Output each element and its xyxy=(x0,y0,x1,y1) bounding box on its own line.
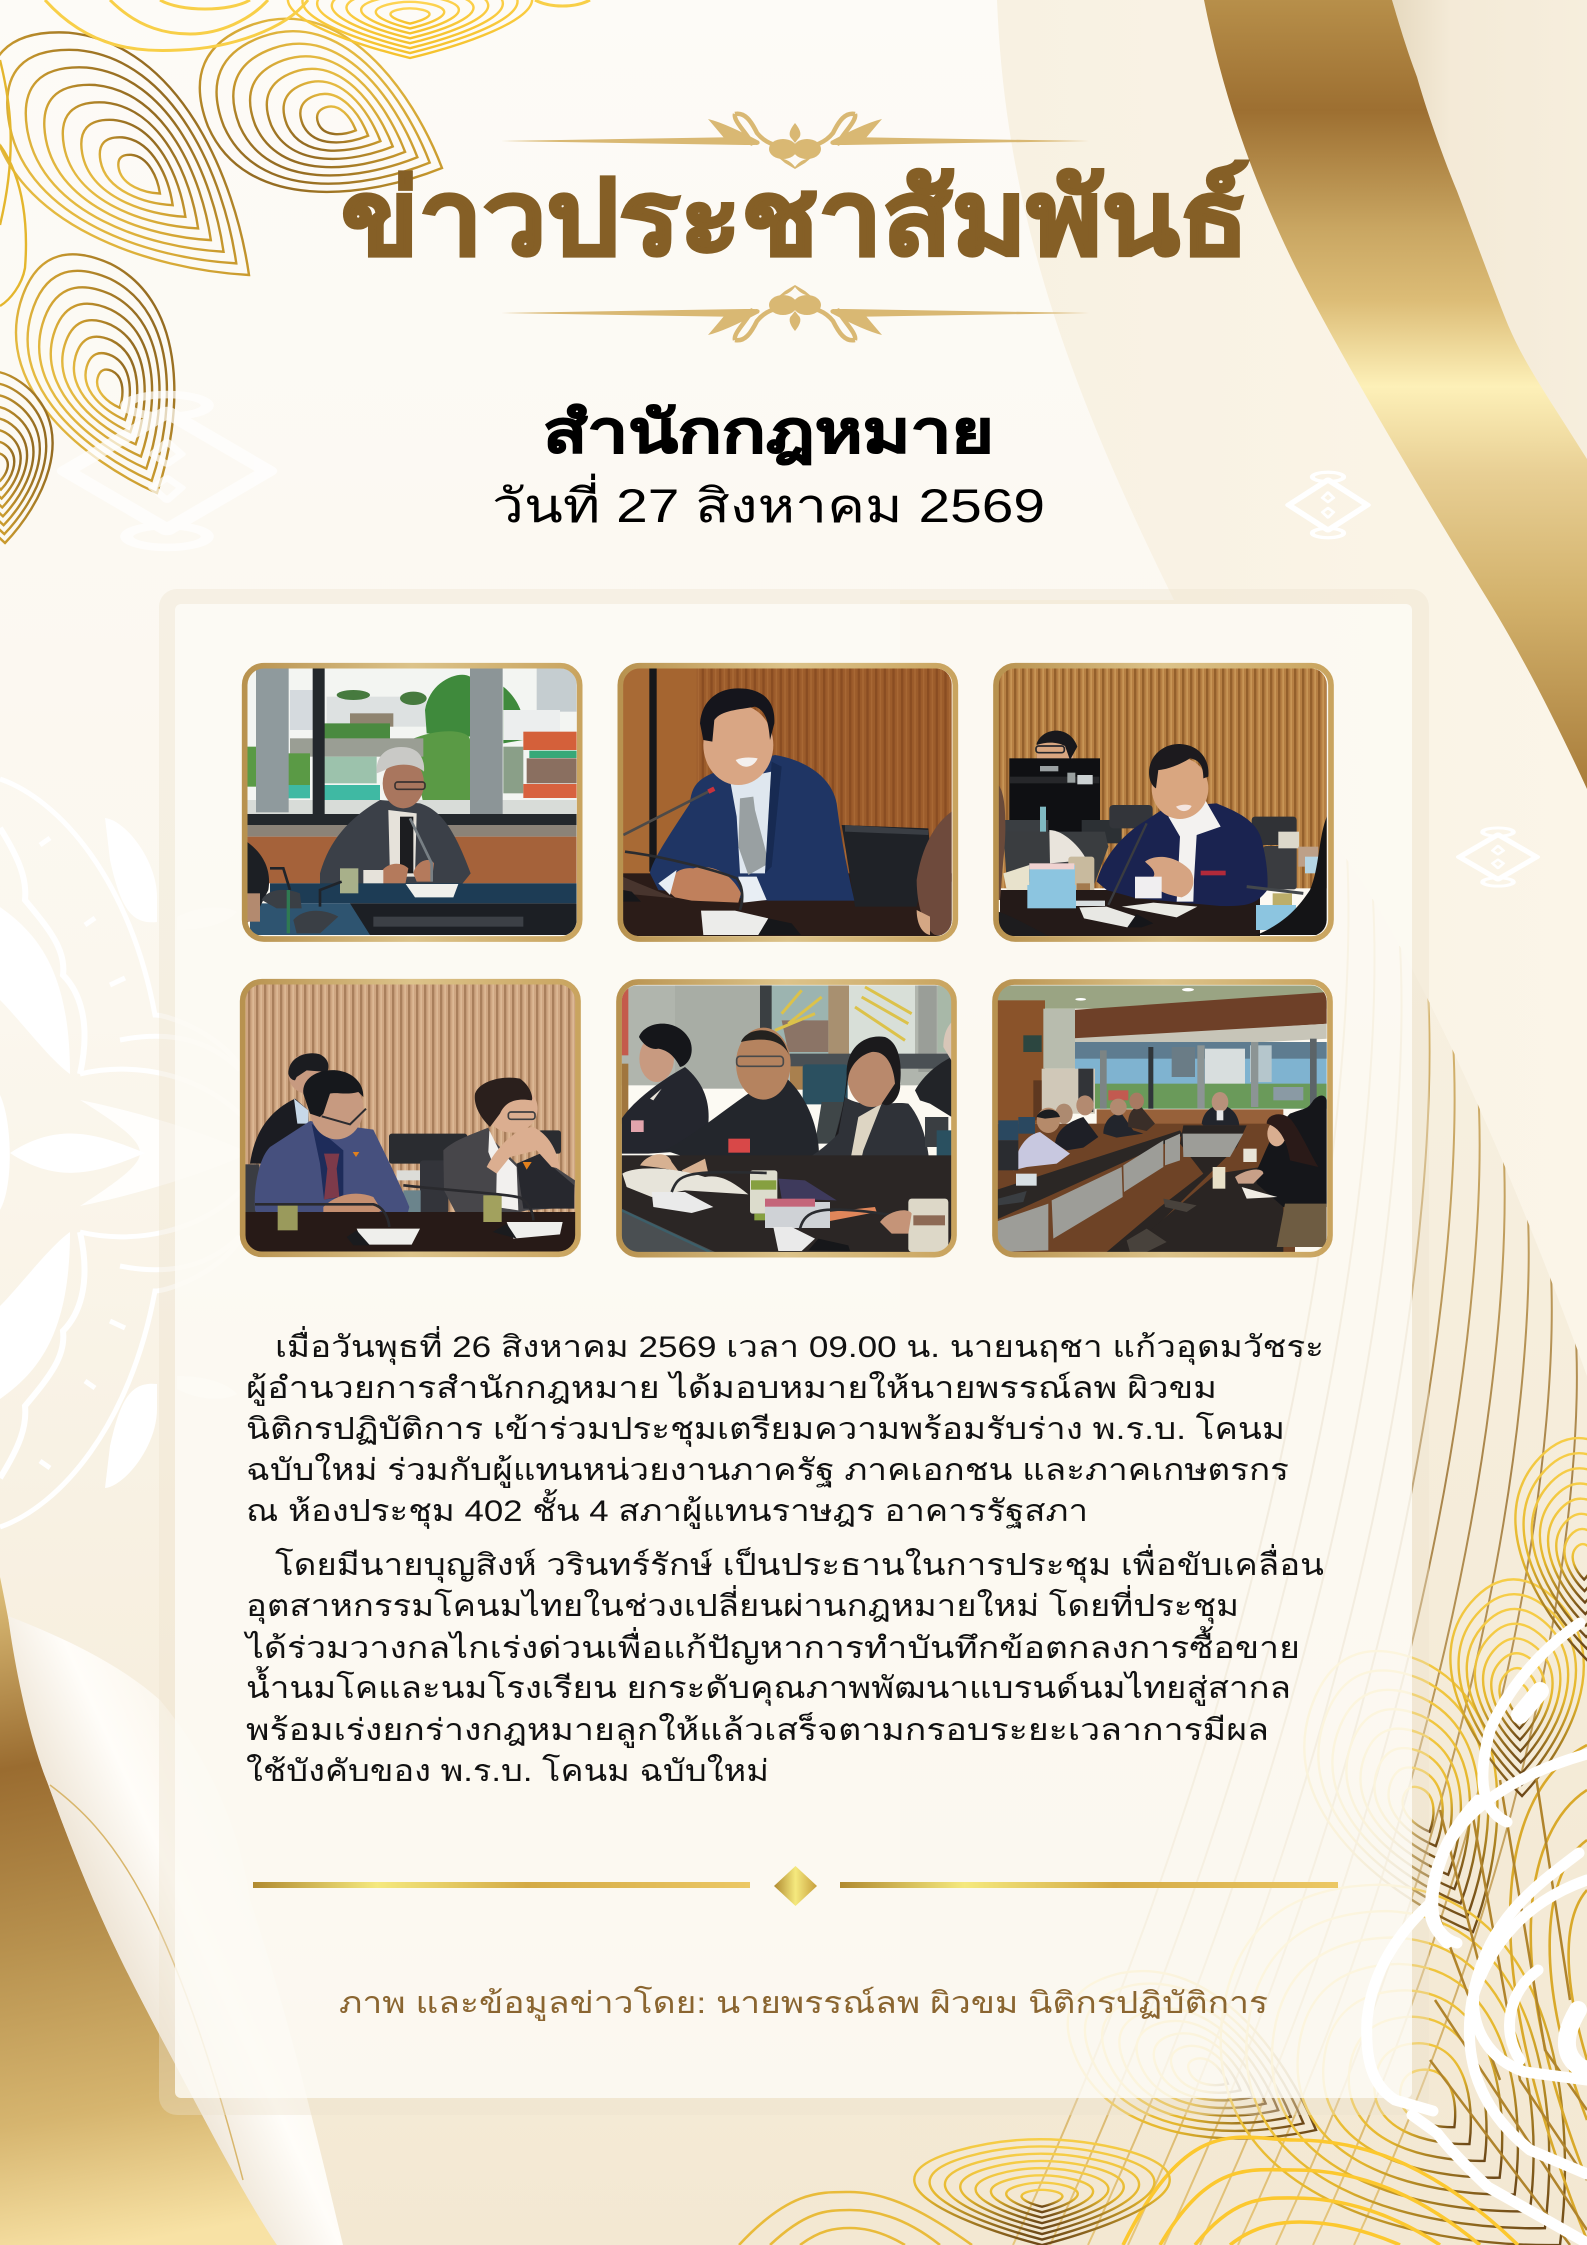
arches C xyxy=(739,2192,972,2245)
bottom ornament xyxy=(501,285,1089,340)
paragraph 2: ได้ร่วมวางกลไกเร่งด่วนเพื่อแก้ปัญหาการทำบันทึกข้อตกลงการซื้อขาย xyxy=(244,1626,1300,1665)
leaf G xyxy=(1048,1946,1316,2173)
divider xyxy=(253,1866,1338,1906)
photo 6 xyxy=(995,982,1332,1255)
paragraph 1: ผู้อำนวยการสำนักกฎหมาย ได้มอบหมายให้นายพรรณ์ลพ ผิวขม xyxy=(246,1370,1217,1406)
leaf E xyxy=(1260,1627,1554,1932)
gold curve bottom left xyxy=(0,1577,277,2245)
top yellow bowl xyxy=(45,0,590,50)
cream sheet xyxy=(997,0,1587,1376)
paragraph 1: ฉบับใหม่ ร่วมกับผู้แทนหน่วยงานภาครัฐ ภาคเอกชน และภาคเกษตรกร xyxy=(246,1453,1289,1488)
title: ข่าวประชาสัมพันธ์ xyxy=(341,160,1249,277)
paragraph 1: เมื่อวันพุธที่ 26 สิงหาคม 2569 เวลา 09.00 น. นายนฤชา แก้วอุดมวัชระ xyxy=(275,1326,1324,1366)
leaf F xyxy=(1193,1881,1587,2245)
panel xyxy=(159,589,1429,2115)
gold leaf top 3 xyxy=(196,0,623,58)
gold ribbon top right xyxy=(1204,0,1587,789)
right leaf 1 xyxy=(1401,1557,1587,1796)
date: วันที่ 27 สิงหาคม 2569 xyxy=(492,473,1045,532)
diagonal gold lines bottom right xyxy=(1430,1770,1587,2245)
white lotus watermark left xyxy=(0,779,250,1527)
paragraph 2 xyxy=(244,1544,1324,1788)
white ornament far right xyxy=(1460,828,1536,886)
photo 2 xyxy=(620,666,955,939)
subtitle: office: สำนักกฎหมาย xyxy=(543,400,994,465)
white lotus strokes bottom right xyxy=(1367,1623,1587,2243)
diamond B xyxy=(819,2129,1265,2245)
top ornament xyxy=(501,114,1089,169)
flame lines right edge xyxy=(1510,1745,1587,2240)
photo 1 xyxy=(245,666,580,939)
photo 5 xyxy=(618,982,955,1255)
paragraph 2: น้ำนมโคและนมโรงเรียน ยกระดับคุณภาพพัฒนาแบรนด์นมไทยสู่สากล xyxy=(246,1666,1291,1707)
left edge gold lines xyxy=(0,60,26,306)
photo 4 xyxy=(243,982,587,1254)
gold leaf left 5 xyxy=(0,354,95,543)
gold leaf top left 1 xyxy=(0,28,249,275)
gold leaf left 4 xyxy=(0,234,218,493)
paragraph 1 xyxy=(246,1326,1324,1530)
arches D xyxy=(1123,2137,1518,2245)
right corner cream xyxy=(1392,0,1587,500)
paragraph 2: พร้อมเร่งยกร่างกฎหมายลูกให้แล้วเสร็จตามกรอบระยะเวลาการมีผล xyxy=(246,1711,1269,1748)
paragraph 2: ใช้บังคับของ พ.ร.บ. โคนม ฉบับใหม่ xyxy=(246,1753,769,1788)
white ornament right xyxy=(1289,472,1367,538)
paragraph 2: อุตสาหกรรมโคนมไทยในช่วงเปลี่ยนผ่านกฎหมายใหม่ โดยที่ประชุม xyxy=(246,1585,1239,1625)
curved gold lines xyxy=(1013,852,1577,2245)
gold leaf top left 2 xyxy=(180,0,442,244)
beige area under sheet xyxy=(900,600,1587,2245)
paragraph 2: โดยมีนายบุญสิงห์ วรินทร์รักษ์ เป็นประธานในการประชุม เพื่อขับเคลื่อน xyxy=(275,1544,1324,1584)
photo 3 xyxy=(996,666,1331,939)
white ornament left xyxy=(66,395,268,547)
right leaf 2 xyxy=(1466,1415,1587,1660)
credit line: ภาพ และข้อมูลข่าวโดย: นายพรรณ์ลพ ผิวขม นิติกรปฏิบัติการ xyxy=(339,1985,1268,2021)
paragraph 1: ณ ห้องประชุม 402 ชั้น 4 สภาผู้แทนราษฎร อาคารรัฐสภา xyxy=(246,1489,1088,1530)
paragraph 1: นิติกรปฏิบัติการ เข้าร่วมประชุมเตรียมความพร้อมรับร่าง พ.ร.บ. โคนม xyxy=(246,1411,1285,1448)
thin gold curve xyxy=(50,1785,243,2180)
cream curl bottom left xyxy=(8,1616,343,2245)
